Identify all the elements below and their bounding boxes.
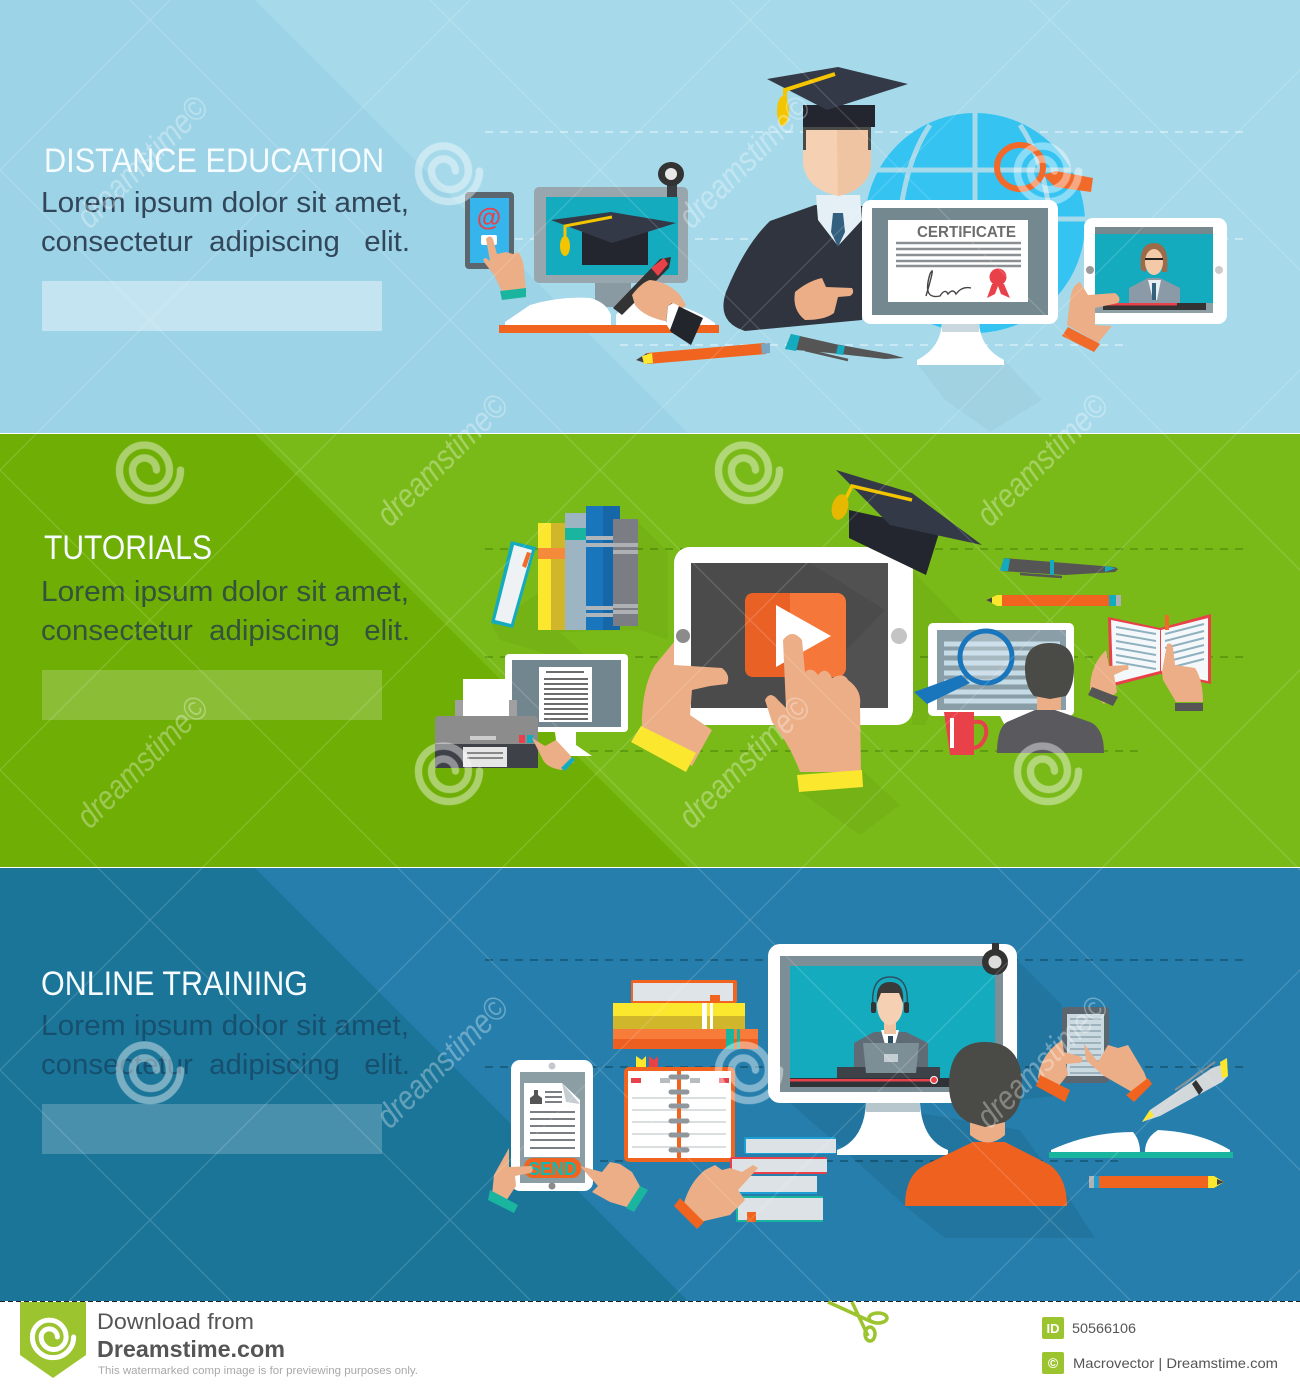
- graduate face: [803, 127, 871, 196]
- shadow: certificate monitor: [918, 360, 1042, 432]
- text block: online training body: [41, 1010, 410, 1081]
- icon: graduate: [723, 67, 908, 331]
- icon: pen: [785, 334, 904, 360]
- blue magnifier: [914, 631, 1012, 704]
- text: image number: 50566106: [1072, 1320, 1136, 1336]
- icon: small monitor with document: [505, 654, 628, 756]
- left hand: [1036, 1040, 1082, 1102]
- cap on screen: [551, 212, 676, 265]
- graduate jacket: [723, 205, 864, 331]
- icon: printer: [435, 679, 538, 768]
- panel: distance education: [0, 0, 1300, 433]
- watermark overlay: dreamstime©: [69, 88, 216, 236]
- icon: right hand tapping: [765, 634, 863, 792]
- icon: horizontal book stack: [613, 980, 758, 1049]
- icon: smartphone with email: [465, 192, 514, 269]
- icon: video tablet: [1084, 218, 1227, 324]
- text: download from: Download from: [97, 1309, 254, 1334]
- icon: hand holding tablet: [1062, 282, 1119, 352]
- badge: image id: [1042, 1317, 1064, 1339]
- yellow book: [538, 523, 565, 630]
- red seal: [987, 268, 1010, 298]
- icon: certificate monitor: [862, 200, 1058, 365]
- text: credit: Macrovector | Dreamstime.com: [1073, 1355, 1278, 1371]
- icon: certificate monitor: CERTIFICATE: [917, 224, 1016, 241]
- shadows: tutorials objects: [492, 522, 965, 835]
- icon: scissors: [828, 1302, 887, 1341]
- video progress bar: [1103, 303, 1206, 310]
- icon: monitor with magnifier: [914, 623, 1074, 745]
- icon: hand pressing printer: [532, 738, 575, 771]
- pale blue book: [565, 513, 586, 630]
- icon: left hand holding tablet: [631, 642, 728, 772]
- graduate pointing hand: [794, 278, 853, 320]
- icon: open book: [1049, 1130, 1233, 1158]
- left hand: [1088, 650, 1129, 706]
- graduate collar and tie: [816, 195, 862, 247]
- icon: pen: [1000, 558, 1118, 577]
- icon: tablet with send button: [511, 1060, 593, 1191]
- text block: online training body: consectetur adipiscing elit.: [41, 1049, 410, 1081]
- icon: hands with open book: [1088, 614, 1211, 711]
- presenter woman: [1129, 243, 1180, 303]
- watermark overlay: dreamstime©: [69, 688, 216, 836]
- watermark overlay: dreamstime©: [969, 988, 1116, 1136]
- icon: hands with e-reader: [1036, 1007, 1152, 1102]
- icon: hand on smartphone: [483, 236, 526, 300]
- watermark overlay: dreamstime©: [369, 386, 516, 534]
- button placeholder: [42, 1104, 382, 1154]
- leaning book: [491, 541, 536, 628]
- orange book: [613, 1029, 758, 1049]
- text block: distance education body: consectetur adipiscing elit.: [41, 226, 410, 258]
- panel: online training: [0, 868, 1300, 1301]
- icon: pencil: [1089, 1176, 1224, 1188]
- icon: marker pen: [1142, 1058, 1228, 1122]
- webcam: [982, 943, 1008, 975]
- icon: magnifier: [997, 145, 1093, 192]
- blue book: [586, 506, 620, 630]
- watermark overlay: dreamstime©: [969, 386, 1116, 534]
- text block: online training body: Lorem ipsum dolor sit amet,: [41, 1010, 409, 1042]
- icon: tablet with play button: [674, 547, 913, 725]
- badge: copyright: [1042, 1352, 1064, 1374]
- logo ribbon: [20, 1302, 86, 1378]
- icon: person from behind: [905, 1042, 1067, 1206]
- icon: pencil: [636, 343, 770, 364]
- icon: stacked books lower: [730, 1137, 836, 1222]
- badge: copyright: ©: [1048, 1355, 1059, 1371]
- text block: distance education body: Lorem ipsum dolor sit amet,: [41, 187, 409, 219]
- watermark overlay: dreamstime©: [671, 688, 818, 836]
- icon: open book with orange cover: [499, 298, 719, 333]
- play button: [745, 593, 846, 677]
- text block: tutorials body: [41, 576, 410, 647]
- text block: distance education body: [41, 187, 410, 258]
- button placeholder: [42, 281, 382, 331]
- shadows: online training objects: [790, 960, 1095, 1238]
- icon: smartphone with email: @: [477, 204, 501, 232]
- icon: graduation cap: [829, 470, 982, 575]
- grey book: [613, 519, 638, 626]
- badge: image id: ID: [1046, 1321, 1060, 1336]
- icon: spiral notebook: [624, 1056, 735, 1162]
- text: watermark notice: This watermarked comp image is for previewing purposes only.: [98, 1365, 418, 1377]
- yellow book: [613, 1003, 745, 1029]
- laptop and desk: [837, 1043, 940, 1078]
- icon: hand with pen: [613, 257, 703, 345]
- send button: SEND: [528, 1159, 576, 1179]
- button placeholder: [42, 670, 382, 720]
- watermark overlay: dreamstime©: [671, 88, 818, 236]
- icon: monitor with presenter: [768, 943, 1017, 1155]
- right hand: [1162, 644, 1203, 711]
- icon: book stack: [491, 506, 638, 630]
- icon: left hand on tablet: [488, 1148, 533, 1213]
- heading: online training: ONLINE TRAINING: [41, 965, 308, 1003]
- icon: right hand on tablet: [580, 1162, 648, 1212]
- text block: tutorials body: consectetur adipiscing elit.: [41, 615, 410, 647]
- watermark overlay: dreamstime©: [369, 988, 516, 1136]
- icon: desktop monitor with cap: [534, 162, 688, 307]
- heading: tutorials: TUTORIALS: [44, 529, 212, 567]
- icon: red mug: [944, 712, 986, 755]
- panel: tutorials: [0, 434, 1300, 867]
- heading: distance education: DISTANCE EDUCATION: [44, 142, 384, 180]
- icon: hand touching books: [674, 1165, 758, 1229]
- graduation cap: [767, 67, 908, 127]
- icon: pencil: [986, 595, 1121, 606]
- panel: footer: [0, 1301, 1300, 1390]
- video progress bar: [790, 1076, 995, 1087]
- text block: tutorials body: Lorem ipsum dolor sit amet,: [41, 576, 409, 608]
- icon: person at monitor: [997, 643, 1104, 753]
- grey book with orange cover: [631, 980, 737, 1003]
- presenter with headset: [854, 977, 928, 1070]
- right hand: [1084, 1044, 1152, 1102]
- icon: globe: [862, 113, 1088, 333]
- text: dreamstime: Dreamstime.com: [97, 1336, 285, 1362]
